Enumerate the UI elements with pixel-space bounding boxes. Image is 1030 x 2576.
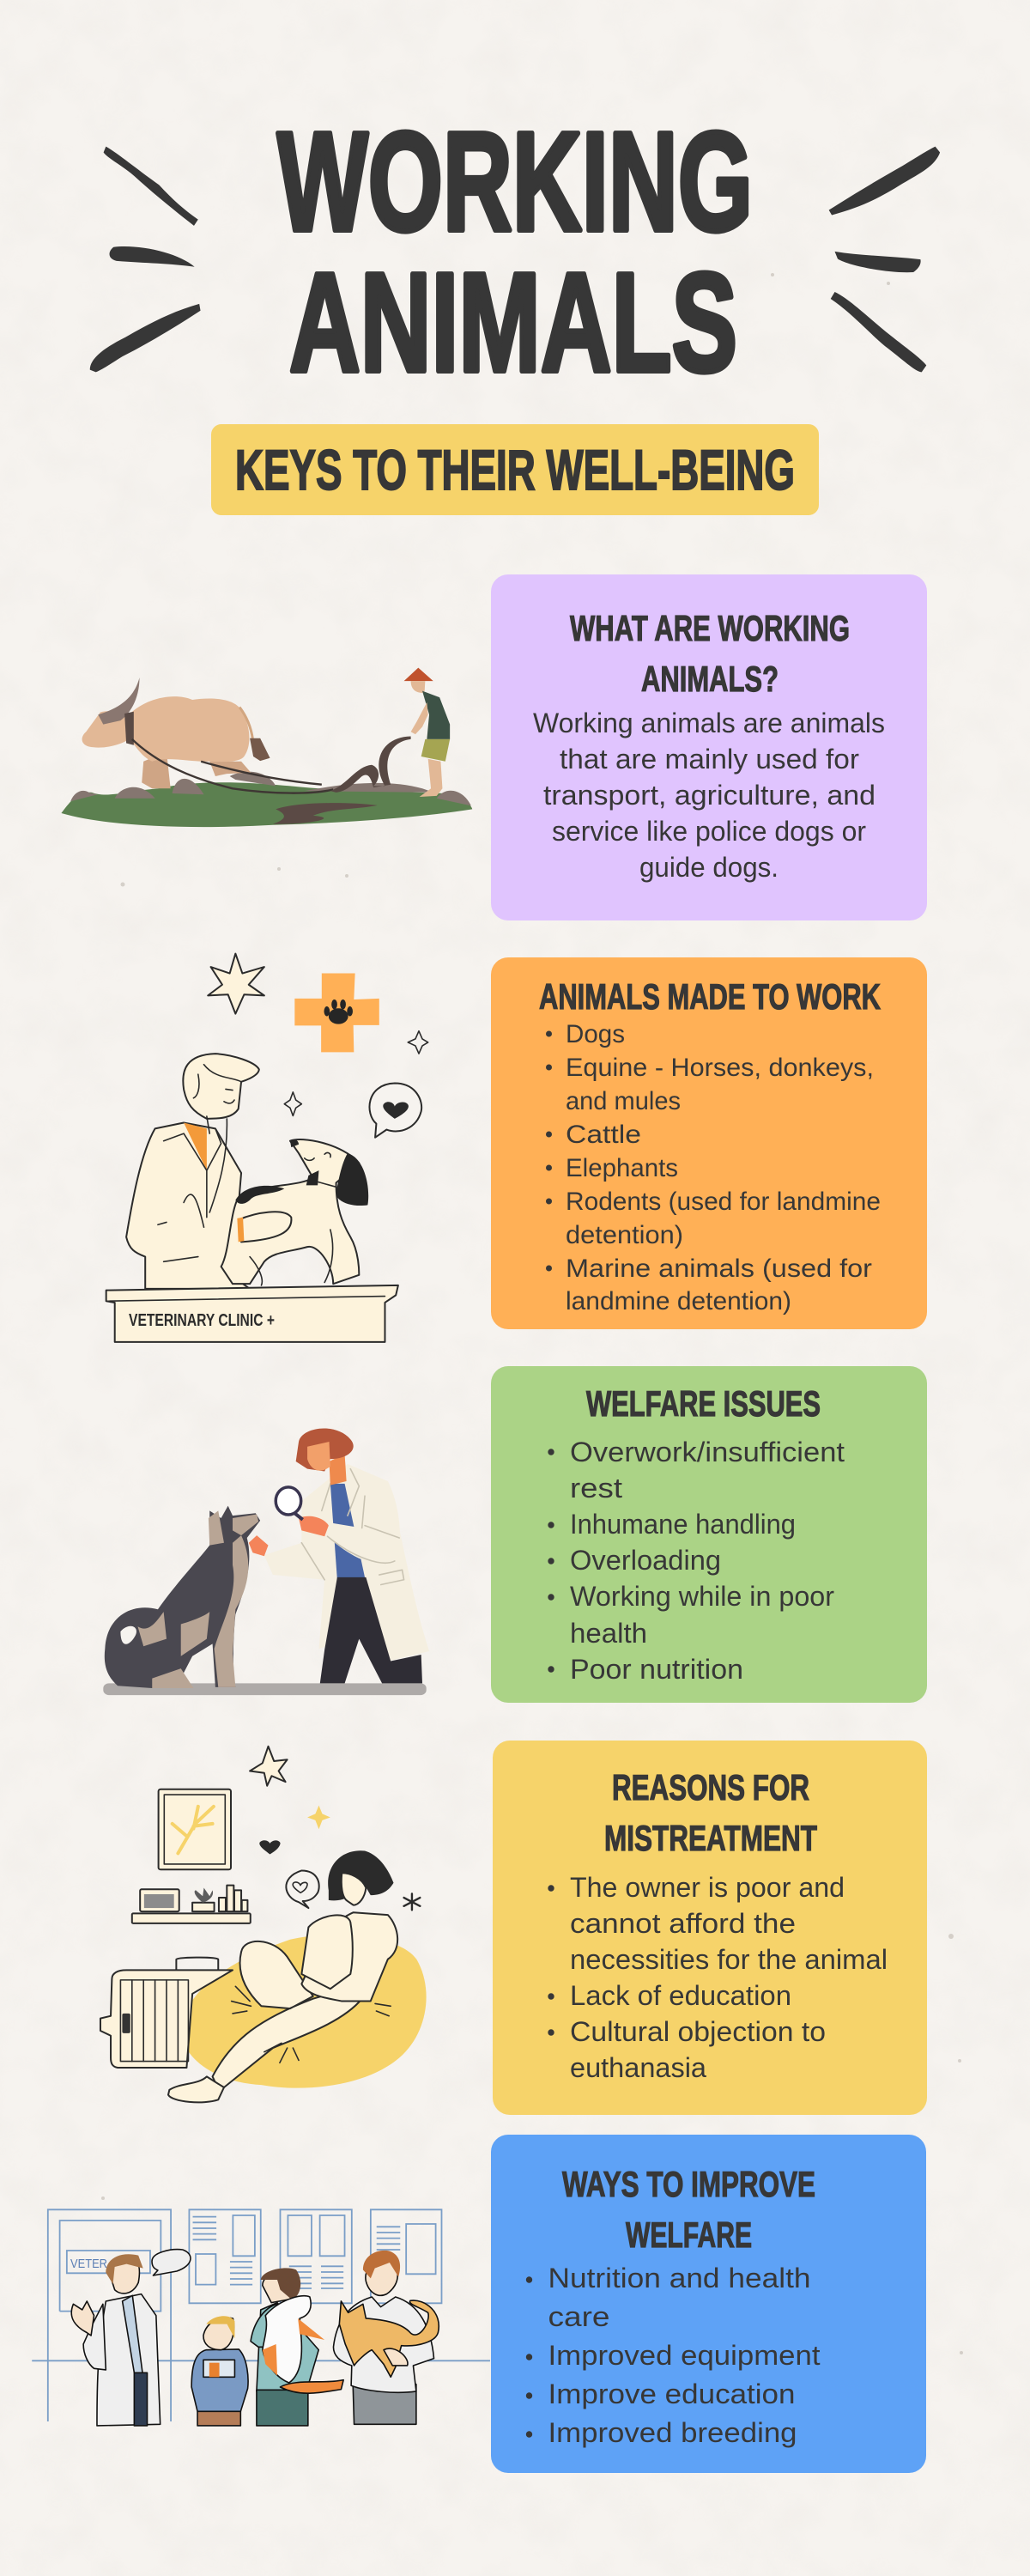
list: reasons: cannot afford the xyxy=(570,1908,796,1939)
list: animals: Rodents (used for landmine xyxy=(566,1188,881,1216)
title: WORKING xyxy=(277,103,753,260)
list: reasons: necessities for the animal xyxy=(570,1944,888,1975)
icon: burst strokes right xyxy=(829,147,940,372)
icon: burst strokes left xyxy=(90,147,201,372)
list: improvements: Improved equipment xyxy=(548,2340,821,2371)
text block: definition: service like police dogs or xyxy=(552,816,866,847)
illustration: vet clinic with pet owners: VETER xyxy=(70,2257,107,2271)
illustration: ox ploughing with farmer xyxy=(61,668,472,827)
list: improvements xyxy=(526,2263,821,2448)
list: issues: health xyxy=(570,1618,647,1649)
illustration: vet clinic with pet owners xyxy=(32,2209,490,2426)
list: animals: and mules xyxy=(566,1087,681,1115)
heading: animals made to work: ANIMALS MADE TO WORK xyxy=(539,976,881,1017)
heading: what are working animals: WHAT ARE WORKING xyxy=(570,608,850,648)
list: animals: detention) xyxy=(566,1221,683,1249)
list: issues: Overwork/insufficient xyxy=(570,1437,845,1467)
text block: definition: that are mainly used for xyxy=(560,744,859,775)
list: reasons: euthanasia xyxy=(570,2052,706,2083)
text block: definition xyxy=(533,708,885,883)
list: reasons xyxy=(548,1872,888,2083)
list: improvements: care xyxy=(548,2301,609,2332)
text block: definition: guide dogs. xyxy=(639,852,779,883)
title xyxy=(277,103,753,401)
text block: definition: Working animals are animals xyxy=(533,708,885,738)
panel: welfare issues xyxy=(491,1366,927,1703)
list: issues: Overloading xyxy=(570,1545,721,1576)
heading: ways to improve welfare xyxy=(562,2164,815,2255)
list: reasons: The owner is poor and xyxy=(570,1872,845,1903)
list: reasons: Cultural objection to xyxy=(570,2016,826,2047)
list: animals: landmine detention) xyxy=(566,1287,791,1315)
illustration: woman hugging pet on bean bag xyxy=(100,1747,427,2102)
heading: welfare issues: WELFARE ISSUES xyxy=(586,1383,821,1424)
heading: what are working animals: ANIMALS? xyxy=(641,659,779,699)
heading: reasons for mistreatment xyxy=(604,1767,817,1858)
panel: what are working animals xyxy=(491,574,927,920)
heading: ways to improve welfare: WELFARE xyxy=(626,2215,752,2255)
list: issues: Working while in poor xyxy=(570,1581,834,1612)
list: animals: Elephants xyxy=(566,1154,678,1182)
title: ANIMALS xyxy=(289,244,737,401)
list: animals xyxy=(546,1020,881,1315)
subtitle banner xyxy=(211,424,819,515)
heading: reasons for mistreatment: MISTREATMENT xyxy=(604,1818,817,1858)
heading: what are working animals xyxy=(570,608,850,699)
text block: definition: transport, agriculture, and xyxy=(543,780,876,811)
list: improvements: Nutrition and health xyxy=(548,2263,810,2293)
illustration: veterinarian with dog: VETERINARY CLINIC + xyxy=(129,1311,275,1330)
list: issues: Poor nutrition xyxy=(570,1654,743,1685)
list: animals: Dogs xyxy=(566,1020,625,1048)
subtitle banner: KEYS TO THEIR WELL-BEING xyxy=(235,438,795,501)
list: improvements: Improved breeding xyxy=(548,2417,797,2448)
heading: reasons for mistreatment: REASONS FOR xyxy=(612,1767,809,1807)
list: animals: Equine - Horses, donkeys, xyxy=(566,1054,874,1082)
list: issues xyxy=(548,1437,845,1685)
list: animals: Marine animals (used for xyxy=(566,1255,872,1283)
list: improvements: Improve education xyxy=(548,2379,795,2409)
illustration: veterinarian with dog xyxy=(106,954,428,1342)
list: animals: Cattle xyxy=(566,1121,641,1149)
panel: ways to improve welfare xyxy=(491,2135,926,2473)
list: issues: Inhumane handling xyxy=(570,1509,796,1540)
list: issues: rest xyxy=(570,1473,622,1504)
list: reasons: Lack of education xyxy=(570,1980,791,2011)
heading: ways to improve welfare: WAYS TO IMPROVE xyxy=(562,2164,815,2204)
panel: animals made to work xyxy=(491,957,927,1329)
panel: reasons for mistreatment xyxy=(493,1741,927,2115)
illustration: vet examining husky xyxy=(103,1428,429,1695)
